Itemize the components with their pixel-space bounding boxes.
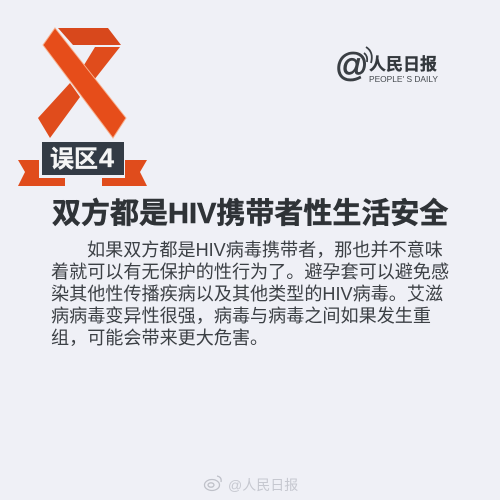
body text: 染其他性传播疾病以及其他类型的HIV病毒。艾滋 [51, 284, 443, 304]
logo icon: at sign: @ [335, 46, 368, 83]
logo: People's Daily [335, 46, 438, 84]
body text: 组，可能会带来更大危害。 [51, 328, 268, 348]
logo english: PEOPLE' S DAILY [369, 74, 438, 84]
body text: 着就可以有无保护的性行为了。避孕套可以避免感 [51, 262, 449, 282]
title: 双方都是HIV携带者性生活安全 [52, 198, 448, 230]
badge background [42, 142, 124, 175]
banner: right ribbon tail [102, 160, 147, 186]
logo waves [364, 47, 372, 63]
body text: 病病毒变异性很强，病毒与病毒之间如果发生重 [51, 306, 431, 326]
logo name: 人民日报 [369, 55, 437, 74]
body text [51, 240, 449, 348]
icon: red ribbon [38, 28, 126, 138]
body text: 如果双方都是HIV病毒携带者，那也并不意味 [87, 240, 443, 260]
banner: left ribbon tail [18, 160, 65, 186]
watermark icon [204, 476, 221, 490]
badge label: 误区4 [50, 143, 114, 173]
watermark: @人民日报 [228, 477, 298, 493]
